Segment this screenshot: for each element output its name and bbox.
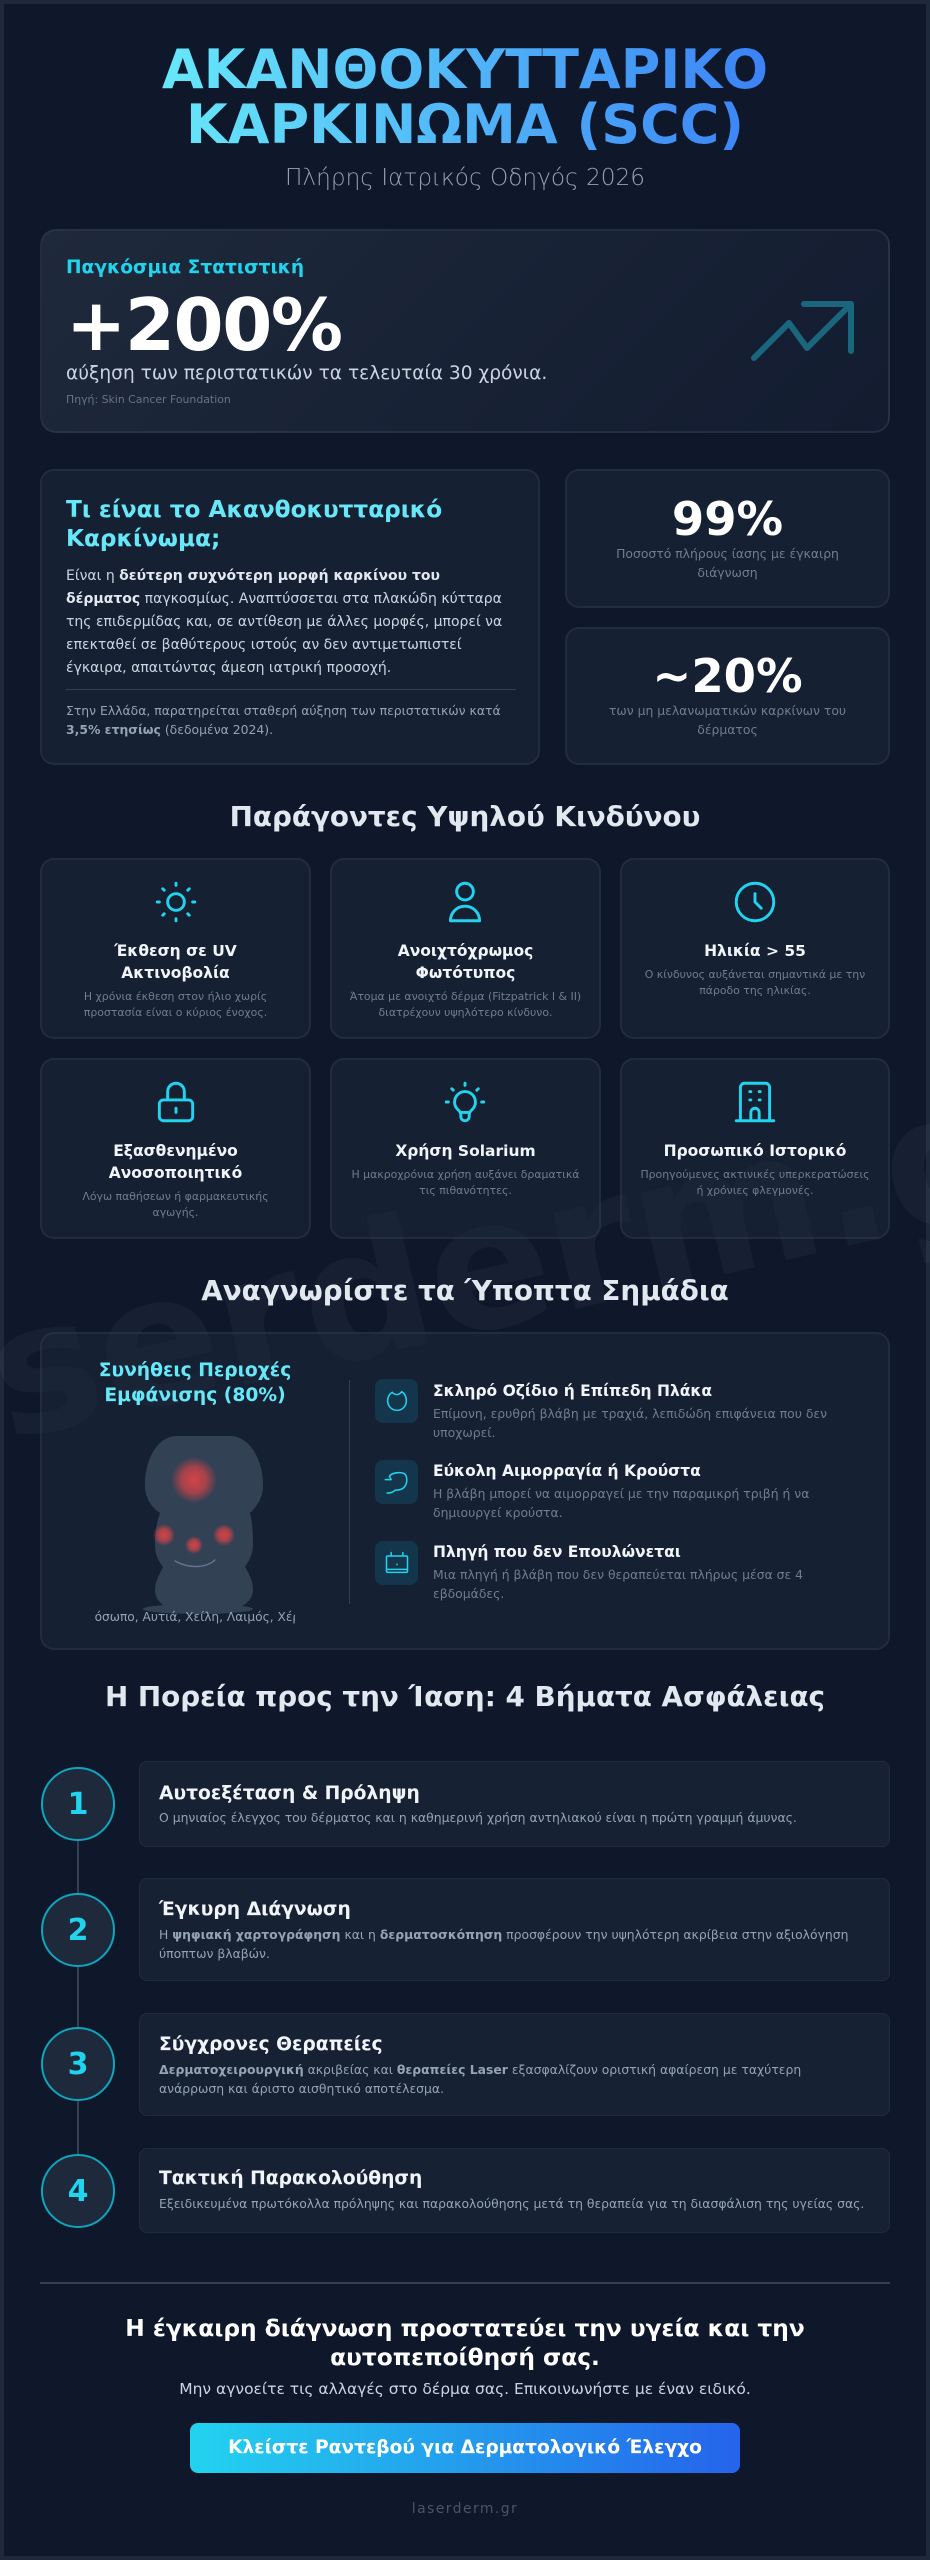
step 4: description: Εξειδικευμένα πρωτόκολλα πρόληψης και παρακολούθησης μετά τη θεραπεία για τη διασφάλιση της υγείας σας. [159, 2196, 864, 2211]
intro paragraph: Είναι η δεύτερη συχνότερη μορφή καρκίνου του [66, 568, 440, 584]
timeline line [77, 1841, 79, 2154]
diagram: head and torso with lesion spots [95, 1436, 295, 1624]
text: phototype description: διατρέχουν υψηλότερο κίνδυνο. [378, 1006, 553, 1019]
icon: light bulb [444, 1082, 486, 1122]
stat card: share of cancers [565, 627, 890, 765]
text: phototype title: Ανοιχτόχρωμος [398, 942, 533, 960]
step 1: number: 1 [68, 1787, 88, 1822]
subtitle: Πλήρης Ιατρικός Οδηγός 2026 [285, 164, 645, 191]
stat label: Ποσοστό πλήρους ίασης με έγκαιρη [616, 546, 839, 561]
sign 3: description: Μια πληγή ή βλάβη που δεν θεραπεύεται πλήρως μέσα σε 4 εβδομάδες. [433, 1567, 803, 1601]
sign 2: title: Εύκολη Αιμορραγία ή Κρούστα [433, 1462, 701, 1480]
intro paragraph: επεκταθεί σε βαθύτερους ιστούς αν δεν αντιμετωπιστεί [66, 637, 462, 653]
step 2: number: 2 [68, 1913, 88, 1948]
text: age description: πάροδο της ηλικίας. [699, 984, 811, 997]
big number: +200% [66, 283, 342, 367]
icon: clock [734, 882, 776, 922]
text: history description: Προηγούμενες ακτινικές υπερκερατώσεις [640, 1168, 870, 1181]
text: immunosuppression description: Λόγω παθήσεων ή φαρμακευτικής [82, 1190, 269, 1203]
risk card: immunosuppression [40, 1058, 311, 1239]
title: ΚΑΡΚΙΝΩΜΑ (SCC) [186, 93, 744, 156]
text: history description: ή χρόνιες φλεγμονές. [696, 1184, 814, 1197]
text: common locations heading: Συνήθεις Περιοχές [99, 1360, 291, 1381]
text: solarium description: τις πιθανότητες. [419, 1184, 512, 1197]
intro paragraph: έγκαιρα, απαιτώντας άμεση ιατρική προσοχή. [66, 660, 391, 676]
stat label [616, 546, 839, 580]
step 2: description: Η ψηφιακή χαρτογράφηση και η δερματοσκόπηση προσφέρουν την υψηλότερη ακρίβεια στην αξιολόγηση ύποπτων βλαβών. [159, 1927, 848, 1961]
greece note [66, 689, 516, 739]
text: phototype description [350, 990, 581, 1019]
sign 2: description: Η βλάβη μπορεί να αιμορραγεί με την παραμικρή τριβή ή να δημιουργεί κρούστα. [433, 1486, 809, 1520]
sign 1: icon [375, 1379, 418, 1423]
text: history description [640, 1168, 870, 1197]
step 1: card [139, 1761, 890, 1847]
step 3: description: Δερματοχειρουργική ακριβείας και θεραπείες Laser εξασφαλίζουν οριστική αφαίρεση με ταχύτερη [159, 2062, 801, 2077]
panel heading: Τι είναι το Ακανθοκυτταρικό [66, 496, 442, 523]
stat label [609, 703, 846, 737]
text: immunosuppression title: Εξασθενημένο [113, 1142, 238, 1160]
step 2: card [139, 1878, 890, 1981]
stat value: 99% [672, 492, 783, 546]
icon: sun [156, 882, 196, 922]
text: UV exposure title [114, 942, 237, 982]
text: common locations heading: Εμφάνισης (80%) [104, 1385, 286, 1406]
sign 1: title: Σκληρό Οζίδιο ή Επίπεδη Πλάκα [433, 1382, 712, 1400]
greece note: 3,5% ετησίως (δεδομένα 2024). [66, 722, 273, 737]
step 3: number: 3 [68, 2047, 88, 2082]
stat label: δέρματος [697, 722, 758, 737]
step 4: number [41, 2154, 115, 2228]
sign 1: description: Επίμονη, ερυθρή βλάβη με τραχιά, λεπιδώδη επιφάνεια που δεν υποχωρεί. [433, 1406, 827, 1440]
panel: global statistic [40, 229, 890, 433]
text: solarium description [352, 1168, 579, 1197]
text: phototype title: Φωτότυπος [416, 964, 515, 982]
label: global statistics: Παγκόσμια Στατιστική [66, 257, 304, 278]
text: phototype description: Άτομα με ανοιχτό δέρμα (Fitzpatrick I & II) [350, 990, 581, 1003]
text: UV exposure title: Έκθεση σε UV [114, 942, 237, 960]
greece note: Στην Ελλάδα, παρατηρείται σταθερή αύξηση των περιστατικών κατά [66, 703, 501, 718]
text: age description [645, 968, 865, 997]
heading: warning signs: Αναγνωρίστε τα Ύποπτα Σημάδια [201, 1274, 729, 1307]
text: immunosuppression title [108, 1142, 242, 1182]
step 3: number [41, 2027, 115, 2101]
text: age title: Ηλικία > 55 [704, 942, 806, 960]
step 2: title: Έγκυρη Διάγνωση [159, 1899, 351, 1920]
intro paragraph [66, 568, 502, 676]
risk card: light phototype [330, 858, 601, 1039]
step 3: description: ανάρρωση και άριστο αισθητικό αποτέλεσμα. [159, 2081, 444, 2096]
text: common locations heading [99, 1360, 291, 1406]
risk card: personal history [620, 1058, 890, 1239]
text: immunosuppression description: αγωγής. [153, 1206, 198, 1219]
statistic description: αύξηση των περιστατικών τα τελευταία 30 χρόνια. [66, 363, 547, 384]
risk card: UV exposure [40, 858, 311, 1039]
heading: risk factors: Παράγοντες Υψηλού Κινδύνου [230, 800, 700, 833]
step 2: number [41, 1893, 115, 1967]
sign 2: icon [375, 1460, 418, 1504]
text: phototype title [398, 942, 533, 982]
panel heading: Καρκίνωμα; [66, 525, 220, 552]
text: UV exposure description [84, 990, 267, 1019]
call to action button [190, 2423, 740, 2473]
text: history title: Προσωπικό Ιστορικό [664, 1142, 846, 1160]
intro paragraph: της επιδερμίδας και, σε αντίθεση με άλλες μορφές, μπορεί να [66, 614, 502, 630]
step 1: title: Αυτοεξέταση & Πρόληψη [159, 1783, 420, 1804]
text: solarium title: Χρήση Solarium [395, 1142, 536, 1160]
icon: person [448, 882, 482, 922]
text: UV exposure description: προστασία είναι ο κύριος ένοχος. [84, 1006, 267, 1019]
text: UV exposure title: Ακτινοβολία [121, 964, 230, 982]
risk card: age [620, 858, 890, 1039]
text: age description: Ο κίνδυνος αυξάνεται σημαντικά με την [645, 968, 865, 981]
step 3: description [159, 2062, 801, 2096]
text: immunosuppression description [82, 1190, 269, 1219]
footer heading: Η έγκαιρη διάγνωση προστατεύει την υγεία και την [125, 2315, 805, 2342]
stat label: διάγνωση [697, 565, 758, 580]
heading: path to cure: Η Πορεία προς την Ίαση: 4 Βήματα Ασφάλειας [105, 1680, 825, 1713]
step 1: description: Ο μηνιαίος έλεγχος του δέρματος και η καθημερινή χρήση αντηλιακού είναι η πρώτη γραμμή άμυνας. [159, 1810, 797, 1825]
text: UV exposure description: Η χρόνια έκθεση στον ήλιο χωρίς [84, 990, 267, 1003]
stat value: ~20% [652, 649, 803, 703]
step 4: number: 4 [68, 2174, 88, 2209]
step 3: title: Σύγχρονες Θεραπείες [159, 2034, 383, 2055]
sign 3: title: Πληγή που δεν Επουλώνεται [433, 1543, 681, 1561]
stat card: cure rate [565, 469, 890, 608]
title: ΑΚΑΝΘΟΚΥΤΤΑΡΙΚΟ [162, 38, 768, 101]
source: Πηγή: Skin Cancer Foundation [66, 393, 231, 406]
icon: lock [158, 1082, 194, 1122]
step 4: title: Τακτική Παρακολούθηση [159, 2168, 422, 2189]
sign 3: icon [375, 1541, 418, 1585]
footer heading [125, 2315, 805, 2371]
call to action button: Κλείστε Ραντεβού για Δερματολογικό Έλεγχο [228, 2437, 702, 2458]
text: solarium description: Η μακροχρόνια χρήση αυξάνει δραματικά [352, 1168, 579, 1181]
title [162, 38, 768, 156]
intro paragraph: δέρματος παγκοσμίως. Αναπτύσσεται στα πλακώδη κύτταρα [66, 591, 502, 607]
step 4: card [139, 2148, 890, 2233]
risk card: solarium [330, 1058, 601, 1239]
website: laserderm.gr [412, 2501, 518, 2517]
panel heading [66, 496, 442, 552]
panel: what is SCC [40, 469, 540, 765]
footer heading: αυτοπεποίθησή σας. [330, 2344, 600, 2371]
footer subtext: Μην αγνοείτε τις αλλαγές στο δέρμα σας. Επικοινωνήστε με έναν ειδικό. [179, 2380, 751, 2398]
step 1: number [41, 1767, 115, 1841]
icon: building [734, 1082, 776, 1122]
stat label: των μη μελανωματικών καρκίνων του [609, 703, 846, 718]
panel: warning signs [40, 1332, 890, 1650]
icon: trending up arrow [751, 301, 854, 361]
text: immunosuppression title: Ανοσοποιητικό [109, 1164, 242, 1182]
step 3: card [139, 2013, 890, 2116]
